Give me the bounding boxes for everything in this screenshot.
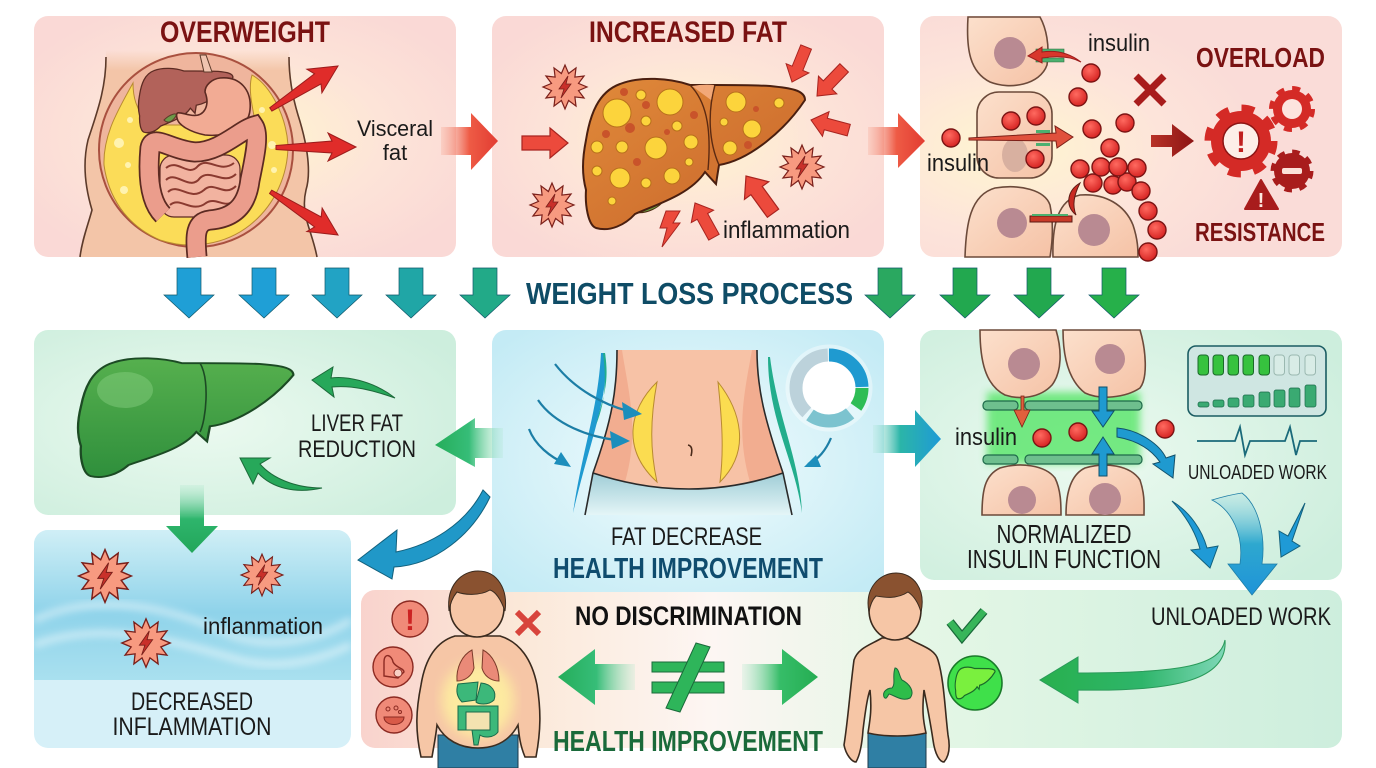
panel: bottom band (361, 590, 1342, 748)
label: decreased inflammation: INFLAMMATION (112, 713, 272, 741)
arrow: upper visceral fat (263, 54, 346, 121)
panel: overweight (34, 16, 456, 257)
icon: burst lower (122, 619, 170, 667)
label: insulin left: insulin (927, 150, 989, 177)
arrow: fat decrease to normalized insulin (873, 410, 941, 467)
insulin molecules (942, 64, 1166, 261)
organ: stomach (884, 668, 912, 699)
arrow: receptor up (1092, 437, 1114, 476)
arrow: lower right (734, 167, 785, 222)
arrow: unloaded work to thin figure (1040, 640, 1225, 703)
illustration: cells (965, 17, 1138, 257)
icon: warning circle: ! (405, 604, 415, 637)
illustration: slim waist (585, 350, 792, 515)
figure: overweight child (417, 571, 540, 768)
heading: health improvement green: HEALTH IMPROVEMENT (553, 726, 823, 758)
icon: small gear (1273, 90, 1311, 128)
arrow: curved top to liver (312, 367, 395, 398)
receptors (1030, 49, 1072, 222)
arrow: liver to inflammation (166, 485, 218, 553)
label: normalized insulin function: NORMALIZED (996, 519, 1132, 549)
illustration: torso with organs (80, 50, 317, 257)
heading: weight loss process: WEIGHT LOSS PROCESS (526, 276, 853, 311)
label: insulin top: insulin (1088, 30, 1150, 57)
arrow: insulin passing through (969, 126, 1073, 148)
icon: large gear with warning: ! (1236, 126, 1246, 159)
arrow: middle visceral fat (276, 133, 356, 161)
arrow: overweight to increased fat (441, 113, 498, 170)
label: visceral fat: fat (383, 140, 407, 165)
label: decreased inflammation (112, 688, 272, 741)
illustration: fatty liver (583, 79, 805, 229)
icon: not equal sign (652, 643, 724, 712)
label: normalized insulin function (967, 519, 1161, 574)
arrow: insulin in (1014, 396, 1030, 427)
arrow: blocked insulin curved (1028, 47, 1081, 63)
arrow: green left (558, 649, 635, 705)
label: visceral fat: Visceral (357, 116, 433, 141)
chart: donut (788, 347, 870, 429)
label: unloaded work band: UNLOADED WORK (1151, 603, 1331, 631)
icon: check mark (950, 611, 984, 637)
label: inflammation: inflammation (723, 217, 850, 244)
panel: decreased inflammation (34, 530, 351, 748)
heading: resistance: RESISTANCE (1195, 217, 1325, 247)
icon: healthy liver (78, 358, 293, 477)
cell nuclei (994, 37, 1110, 246)
arrow: into liver left (522, 128, 568, 158)
insulin glow (987, 392, 1140, 464)
arrow: large curved blue down (1212, 493, 1277, 595)
arrow: increased fat to overload (868, 113, 925, 168)
icon: workload monitor (1188, 346, 1326, 416)
arrow: right (808, 108, 852, 142)
arrow: curved insulin flow (1117, 428, 1175, 478)
heading: overload: OVERLOAD (1196, 42, 1325, 73)
label: liver fat reduction (298, 410, 416, 463)
icon: healthy liver badge (948, 656, 1002, 710)
arrowheads: fat inward (554, 402, 821, 467)
organs: lungs (457, 650, 499, 681)
heading: no discrimination: NO DISCRIMINATION (575, 601, 802, 631)
arrow: lower visceral fat (263, 180, 346, 247)
label: visceral fat (357, 116, 433, 165)
label: inflanmation: inflanmation (203, 613, 323, 639)
icon: lightning bolt (660, 211, 680, 247)
icon: warning triangle (1245, 180, 1278, 212)
label: liver fat reduction: LIVER FAT (311, 410, 403, 437)
heading: overweight: OVERWEIGHT (160, 16, 330, 49)
organs: green digestive (457, 682, 498, 745)
icon: warning triangle: ! (1258, 190, 1264, 212)
row of down arrows right (865, 268, 1139, 318)
panel: normalized insulin (920, 330, 1342, 580)
arrow: fat decrease to inflammation (358, 490, 490, 579)
arrow: curved left blue (1172, 501, 1218, 568)
icon: large gear with warning (1211, 111, 1271, 171)
arrow: receptor down (1092, 387, 1114, 427)
label: normalized insulin function: INSULIN FUNCTION (967, 544, 1161, 574)
icon: burst large (79, 550, 131, 602)
arrow: fat decrease to liver (435, 418, 503, 467)
insulin molecules (1033, 420, 1174, 447)
figure: healthy child (844, 573, 949, 768)
panel: liver fat reduction (34, 330, 456, 515)
label: insulin: insulin (955, 424, 1017, 451)
row of down arrows left (164, 268, 510, 318)
icon: red cross (517, 612, 539, 634)
arrow: green right (742, 649, 818, 705)
heading: increased fat: INCREASED FAT (589, 16, 787, 49)
panel: fat decrease (492, 330, 884, 592)
heading: health improvement blue: HEALTH IMPROVEMENT (553, 553, 823, 585)
arrow: overload to gears (1151, 124, 1194, 157)
arrow: top right two (808, 59, 853, 105)
arrows: fat inward (529, 364, 831, 464)
blocked receptor curve (1069, 183, 1080, 215)
label: fat decrease: FAT DECREASE (611, 523, 762, 551)
panel: overload resistance (920, 16, 1342, 261)
arrow: lower small (684, 197, 725, 243)
label: liver fat reduction: REDUCTION (298, 436, 416, 463)
illustration: healthy cells (980, 330, 1145, 515)
icon: warning circle (392, 601, 428, 637)
icon: organ circle (373, 647, 413, 687)
nuclei (1008, 344, 1125, 515)
icon: inflammation burst top left (543, 65, 587, 109)
arrow: top right one (781, 42, 818, 87)
icon: heartbeat line (1197, 427, 1317, 455)
label: decreased inflammation: DECREASED (131, 688, 253, 716)
panel: increased fat (492, 16, 884, 257)
label: unloaded work small: UNLOADED WORK (1188, 462, 1328, 484)
icon: inflammation burst right (780, 145, 824, 189)
icon: food circle (376, 697, 412, 733)
membranes (983, 401, 1142, 464)
icon: dark gear minus (1274, 153, 1310, 189)
icon: red cross (1136, 76, 1164, 104)
icon: burst small (241, 554, 283, 596)
arrow: small right blue (1279, 503, 1305, 557)
icon: inflammation burst lower left (530, 183, 574, 227)
arrow: curved lower to liver (240, 458, 322, 490)
body outline swooshes (573, 353, 802, 513)
